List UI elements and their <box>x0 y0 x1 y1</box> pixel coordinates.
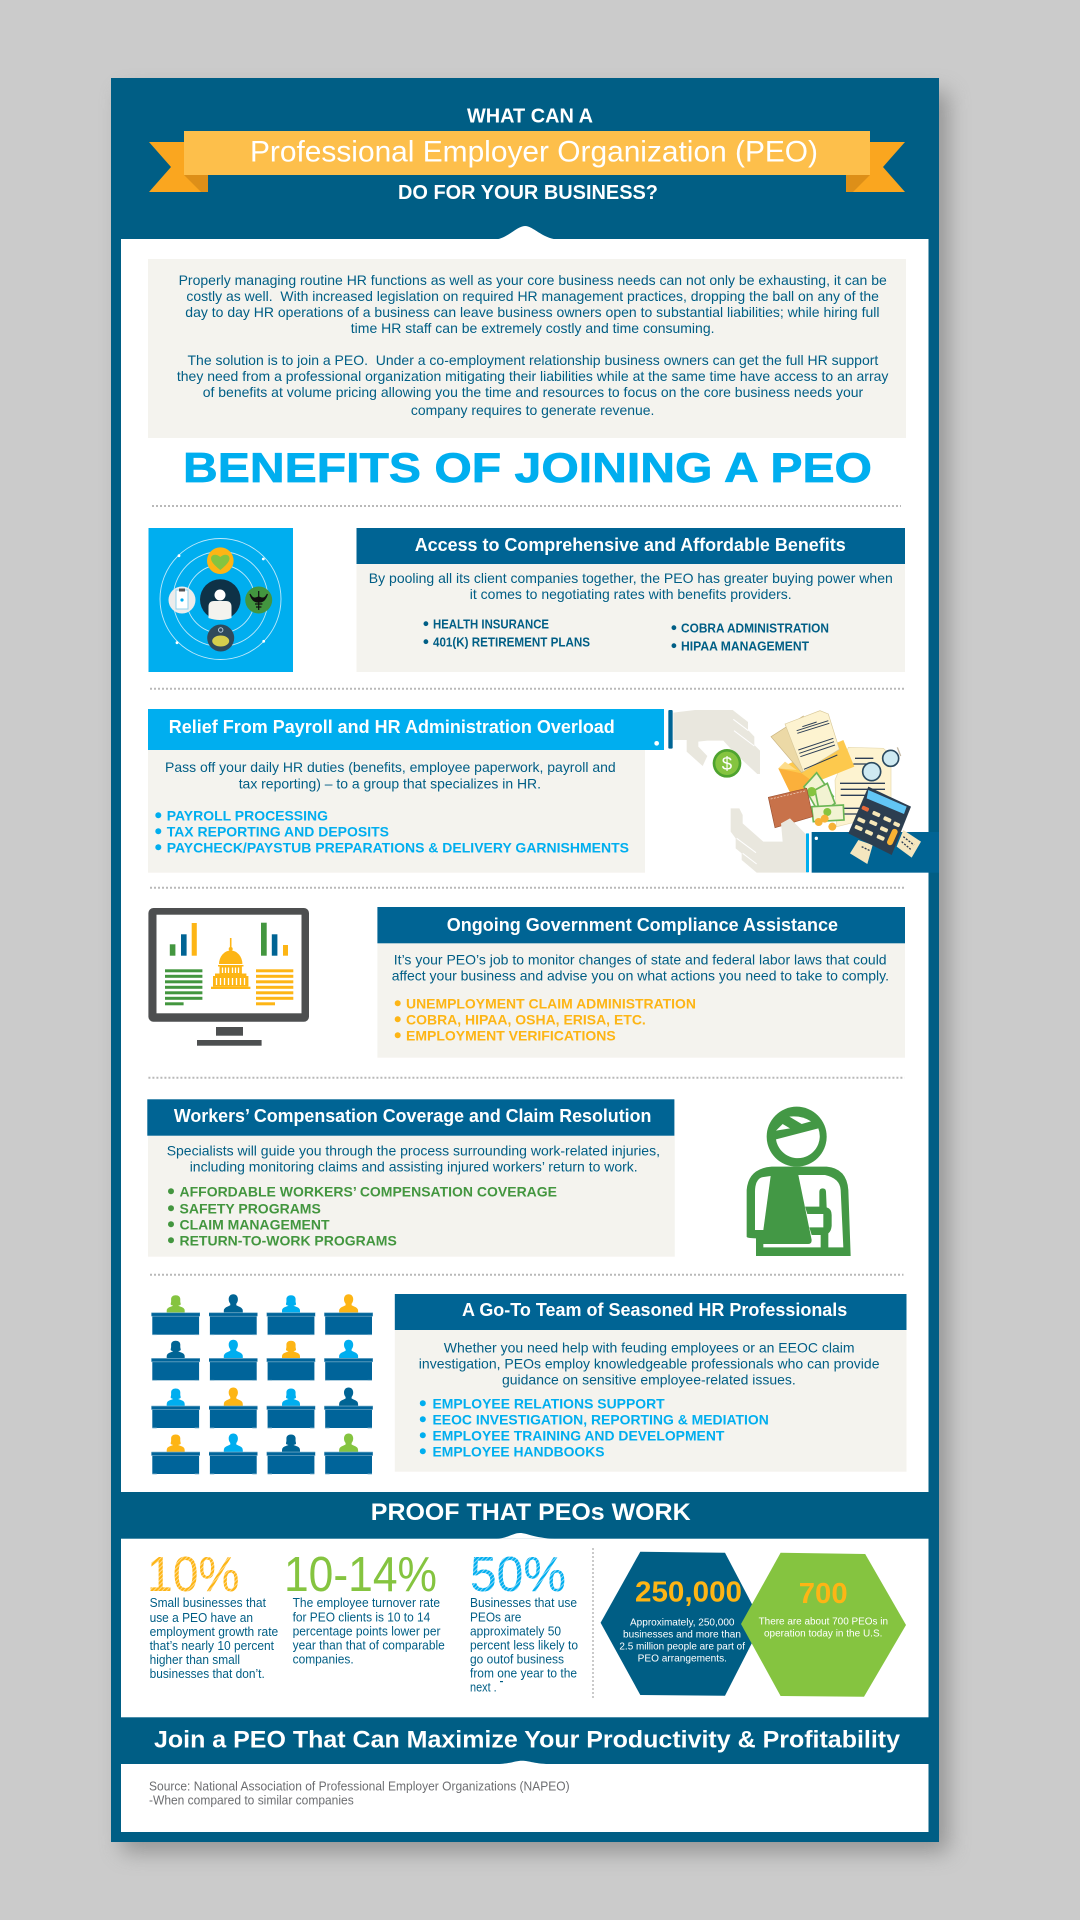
panel: HR team: guidance on sensitive employee-related issues. <box>502 1371 796 1387</box>
panel: intro text: costly as well. With increased legislation on required HR management practices, dropping the ball on any of the <box>186 288 879 304</box>
panel: intro text: day to day HR operations of a business can leave business owners open to substantial liabilities; while hiring full <box>185 304 880 320</box>
stat: 10 percent: Small businesses that <box>150 1595 266 1610</box>
cuff <box>668 710 673 749</box>
heading: benefits of joining a PEO: BENEFITS OF JOINING A PEO <box>183 444 872 491</box>
source notes: -When compared to similar companies <box>149 1794 354 1808</box>
stat hexagon: 700: 700 <box>799 1578 848 1610</box>
stat: 10 percent: use a PEO have an <box>150 1610 253 1625</box>
icon: benefits orbit <box>148 528 293 672</box>
stat: 10 percent <box>147 1548 278 1681</box>
panel: government compliance <box>377 907 905 1058</box>
head with bandage <box>767 1107 827 1167</box>
bullet list <box>168 1183 557 1248</box>
capitol <box>211 938 250 989</box>
payment sheet <box>835 747 891 827</box>
stat: 10-14 percent: percentage points lower per <box>293 1624 441 1638</box>
calculator <box>848 787 911 855</box>
icon: hands exchanging money and paperwork <box>654 710 939 873</box>
bullet list <box>395 995 696 1043</box>
panel title: Access to Comprehensive and Affordable Benefits <box>415 535 846 555</box>
bottom cuff <box>806 833 809 872</box>
stat: 10-14 percent: year than that of comparable <box>293 1638 445 1652</box>
panel body <box>395 1330 906 1472</box>
icon: injured worker <box>747 1107 851 1256</box>
stat: 50 percent <box>470 1548 578 1694</box>
panel title: A Go-To Team of Seasoned HR Professionals <box>462 1300 847 1320</box>
stat: 50 percent: go outof business <box>470 1652 564 1666</box>
panel text: Pass off your daily HR duties (benefits, employee paperwork, payroll and <box>165 759 616 775</box>
panel body <box>377 943 905 1058</box>
bullet list: AFFORDABLE WORKERS’ COMPENSATION COVERAGE <box>180 1183 557 1199</box>
stat: 10-14 percent: 10-14% <box>284 1548 437 1602</box>
stat: 50 percent: PEOs are <box>470 1610 521 1624</box>
stat: 10 percent: businesses that don’t. <box>150 1666 265 1681</box>
header: title banner <box>149 106 905 204</box>
stat hexagon: 250,000: 250,000 <box>635 1576 742 1608</box>
panel body <box>148 750 645 873</box>
envelope <box>778 740 854 792</box>
ribbon right tail <box>846 142 905 192</box>
panel: workers compensation <box>147 1099 675 1257</box>
body <box>747 1167 851 1256</box>
panel text: Specialists will guide you through the process surrounding work-related injuries, <box>167 1142 660 1158</box>
stat: 50 percent: from one year to the <box>470 1666 577 1680</box>
stat: 10 percent: employment growth rate <box>150 1624 278 1639</box>
band title: PROOF THAT PEOs WORK <box>371 1499 691 1526</box>
heading line 3: DO FOR YOUR BUSINESS? <box>398 182 658 204</box>
bullet list: HEALTH INSURANCE <box>433 616 549 631</box>
stat: 50 percent: 50% <box>470 1548 566 1602</box>
panel text: It’s your PEO’s job to monitor changes of state and federal labor laws that could <box>394 951 887 967</box>
panel: intro text: time HR staff can be extremely costly and time consuming. <box>351 320 714 336</box>
bullet list: EMPLOYEE RELATIONS SUPPORT <box>432 1395 665 1411</box>
stat hexagon: 250,000: businesses and more than <box>623 1629 741 1641</box>
stat hexagon: 250,000 <box>601 1552 762 1696</box>
stat: 10 percent: that’s nearly 10 percent <box>150 1638 274 1653</box>
panel: government compliance: affect your business and advise you on what actions you need to take to comply. <box>392 967 889 983</box>
panel header <box>148 709 664 750</box>
coins <box>815 815 836 831</box>
stat hexagon: 250,000: Approximately, 250,000 <box>630 1617 735 1629</box>
source notes <box>149 1780 570 1808</box>
stat: 50 percent: approximately 50 <box>470 1624 561 1638</box>
banknotes <box>804 773 833 815</box>
band title: Join a PEO That Can Maximize Your Productivity & Profitability <box>154 1727 901 1754</box>
stat: 10-14 percent: The employee turnover rate <box>293 1595 440 1610</box>
bullet list: TAX REPORTING AND DEPOSITS <box>167 823 389 839</box>
panel shadow <box>122 92 948 1852</box>
panel body <box>148 1136 675 1257</box>
panel: HR team <box>395 1294 906 1472</box>
bullet list: COBRA ADMINISTRATION <box>681 620 829 635</box>
bullet list: RETURN-TO-WORK PROGRAMS <box>180 1232 397 1248</box>
section band: call to action <box>111 1717 939 1764</box>
bullet list: UNEMPLOYMENT CLAIM ADMINISTRATION <box>406 995 696 1011</box>
wallet <box>768 788 813 828</box>
bullet list <box>420 1395 769 1459</box>
stat: 10-14 percent <box>284 1548 445 1666</box>
stat hexagon: 250,000: 2.5 million people are part of <box>619 1641 745 1653</box>
bullet list: PAYROLL PROCESSING <box>167 807 328 823</box>
bullet list: EMPLOYEE HANDBOOKS <box>432 1443 604 1459</box>
white content area <box>121 239 928 1832</box>
panel header <box>356 528 905 564</box>
stat: 50 percent: Businesses that use <box>470 1595 577 1610</box>
panel: intro text <box>148 259 906 438</box>
panel header <box>395 1294 906 1330</box>
panel header <box>147 1099 674 1136</box>
dollar coin <box>713 749 741 778</box>
glasses <box>863 750 899 781</box>
bullet list: 401(K) RETIREMENT PLANS <box>433 634 590 649</box>
panel text: Whether you need help with feuding employees or an EEOC claim <box>444 1339 854 1355</box>
bullet list: EMPLOYMENT VERIFICATIONS <box>406 1027 616 1043</box>
stat hexagon: 700: There are about 700 PEOs in <box>759 1616 888 1628</box>
top hand <box>673 710 760 774</box>
stat: 10-14 percent: companies. <box>293 1652 354 1666</box>
panel: workers compensation: including monitoring claims and assisting injured workers’ return to work. <box>190 1158 638 1174</box>
stat: 50 percent: next . <box>470 1680 497 1694</box>
bullet list <box>155 807 629 855</box>
heading line 1: WHAT CAN A <box>467 106 593 128</box>
bullet list: CLAIM MANAGEMENT <box>180 1216 330 1232</box>
bottom hand <box>731 808 807 873</box>
panel: intro text: Properly managing routine HR functions as well as your core business needs can not only be exhausting, it can be <box>179 272 887 288</box>
icon: team at desks <box>151 1294 373 1474</box>
text lines <box>165 969 202 1005</box>
source notes: Source: National Association of Professional Employer Organizations (NAPEO) <box>149 1780 570 1794</box>
bullet list: EEOC INVESTIGATION, REPORTING & MEDIATION <box>432 1411 769 1427</box>
outer frame <box>111 78 939 1842</box>
resume papers <box>771 716 820 773</box>
stat: 10 percent: higher than small <box>150 1652 240 1667</box>
panel text: By pooling all its client companies together, the PEO has greater buying power when <box>369 570 893 586</box>
panel: benefits access <box>356 528 905 672</box>
panel header <box>377 907 905 943</box>
stat hexagon: 700: operation today in the U.S. <box>764 1628 882 1640</box>
bullet list: HIPAA MANAGEMENT <box>681 638 809 653</box>
stat: 50 percent: percent less likely to <box>470 1638 578 1652</box>
stat hexagon: 250,000: PEO arrangements. <box>638 1653 727 1665</box>
panel title: Relief From Payroll and HR Administration Overload <box>169 717 615 737</box>
bullet list: COBRA, HIPAA, OSHA, ERISA, ETC. <box>406 1011 646 1027</box>
bullet list: EMPLOYEE TRAINING AND DEVELOPMENT <box>432 1427 725 1443</box>
ribbon folds <box>184 175 870 192</box>
stat: 10-14 percent: for PEO clients is 10 to 14 <box>293 1610 430 1624</box>
panel body <box>356 564 905 672</box>
panel: payroll relief: tax reporting) – to a group that specializes in HR. <box>239 775 541 791</box>
panel: intro text: they need from a professional organization mitigating their liabilities while at the same time have access to an array <box>177 368 888 384</box>
panel: intro text: The solution is to join a PEO. Under a co-employment relationship business owners can get the full HR support <box>188 352 878 368</box>
header notch <box>496 226 557 240</box>
bar charts <box>170 944 175 956</box>
panel: benefits access: it comes to negotiating rates with benefits providers. <box>470 586 792 602</box>
panel: HR team: investigation, PEOs employ knowledgeable professionals who can provide <box>419 1355 880 1371</box>
panel title: Ongoing Government Compliance Assistance <box>447 915 838 935</box>
bullet list: SAFETY PROGRAMS <box>180 1200 321 1216</box>
ribbon main <box>184 131 870 175</box>
icon: hands exchanging money and paperwork: $ <box>722 753 733 774</box>
stat: 10 percent: 10% <box>147 1548 240 1602</box>
panel title: Workers’ Compensation Coverage and Claim Resolution <box>174 1106 651 1126</box>
section band: proof <box>111 1492 939 1539</box>
panel: intro text: company requires to generate revenue. <box>411 402 654 418</box>
bullet list: PAYCHECK/PAYSTUB PREPARATIONS & DELIVERY GARNISHMENTS <box>167 839 629 855</box>
stat hexagon: 700 <box>741 1553 906 1697</box>
panel: payroll relief <box>148 709 664 873</box>
receipts <box>850 840 873 864</box>
bullet list <box>424 616 829 653</box>
icon: monitor with capitol and charts <box>148 908 309 1046</box>
ribbon left tail <box>149 142 208 192</box>
heading line 2: Professional Employer Organization (PEO) <box>250 136 818 169</box>
monitor frame <box>148 908 309 1022</box>
panel: intro text: of benefits at volume pricing allowing you the time and resources to focus on the core business needs your <box>203 384 864 400</box>
